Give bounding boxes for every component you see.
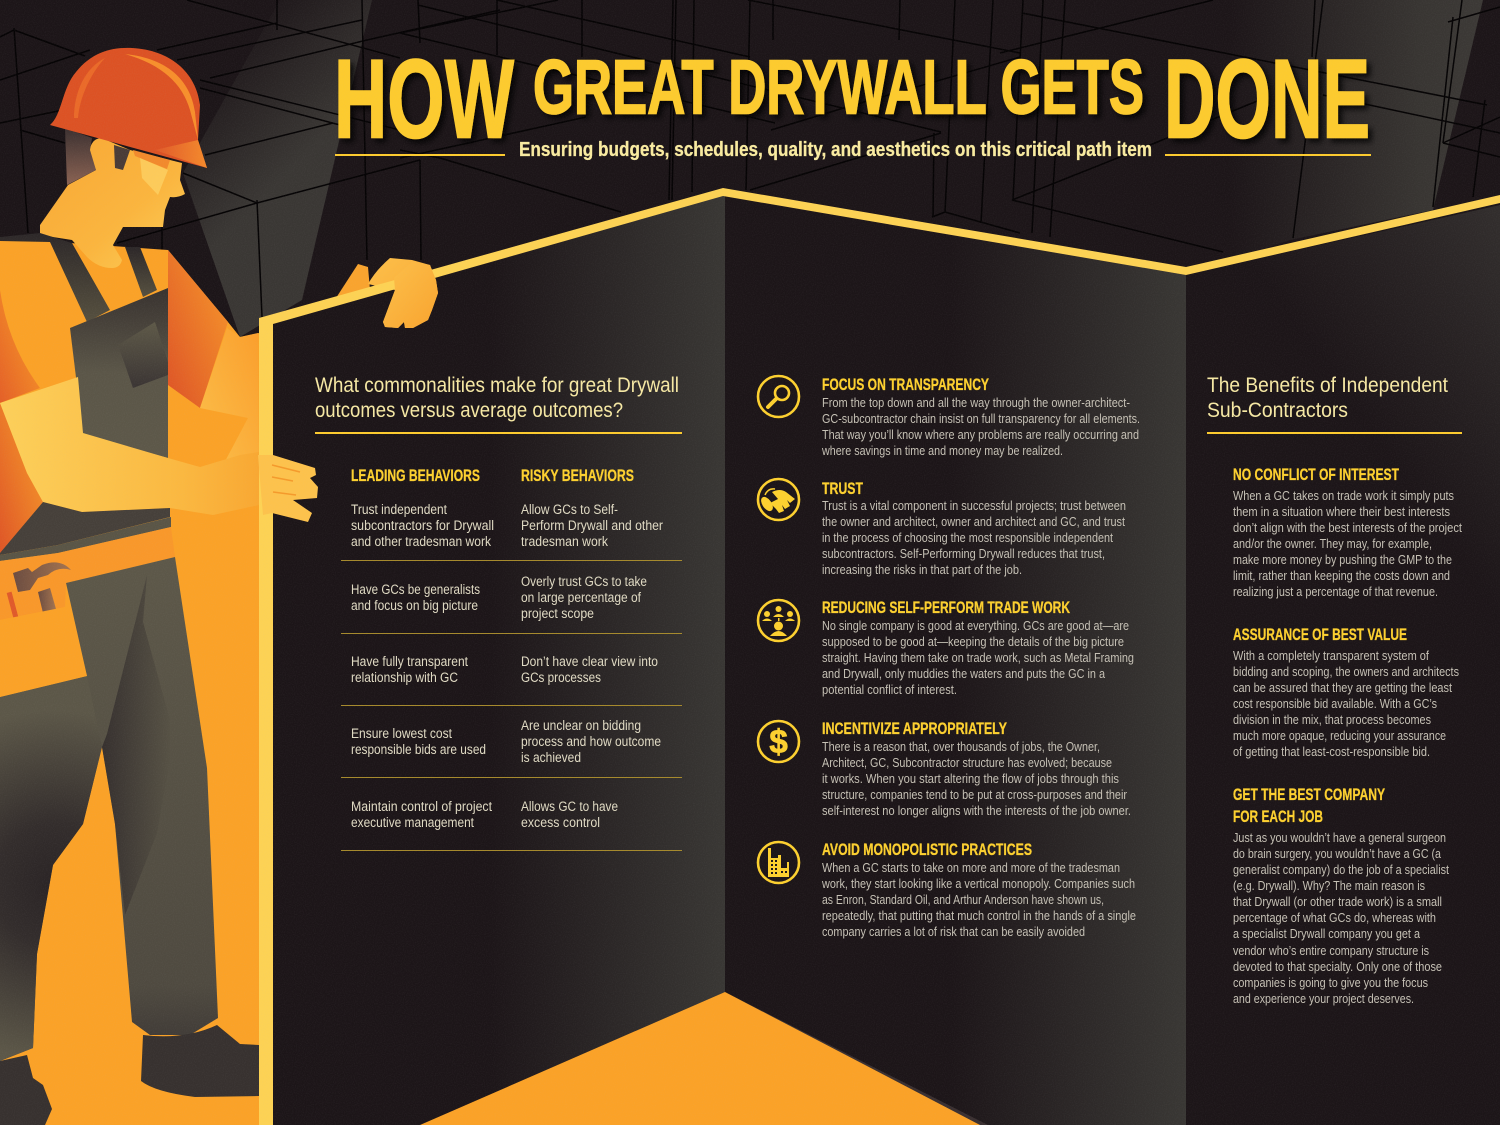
- section: avoid monopolistic practices: AVOID MONOPOLISTIC PRACTICES: [822, 840, 1032, 859]
- section: incentivize appropriately: it works. When you start altering the flow of jobs through this: [822, 771, 1119, 786]
- section: trust: in the process of choosing the most responsible independent: [822, 530, 1113, 545]
- cheek highlight: [140, 158, 168, 195]
- section: incentivize appropriately: Architect, GC, Subcontractor structure has evolved; because: [822, 755, 1112, 770]
- row 1: Allow GCs to Self-: [521, 502, 618, 517]
- row 4: [351, 718, 661, 765]
- section: assurance of best value: can be assured that they are getting the least: [1233, 680, 1452, 695]
- icon: factory buildings: [758, 842, 799, 883]
- row 5: [351, 799, 618, 830]
- upper arm: [200, 328, 259, 467]
- left panel heading: [315, 374, 679, 422]
- section: reducing self-perform trade work: straight. Having them take on trade work, such as Metal Framing: [822, 650, 1134, 665]
- section: reducing self-perform trade work: No single company is good at everything. GCs are good at—are: [822, 618, 1129, 633]
- row 4: Are unclear on bidding: [521, 718, 641, 733]
- section: focus on transparency: GC-subcontractor chain insist on full transparency for all elements.: [822, 411, 1140, 426]
- icon: handshake: [758, 479, 799, 520]
- section: get the best company for each job: FOR EACH JOB: [1233, 807, 1323, 826]
- trousers: [0, 557, 218, 1061]
- belt: [0, 517, 171, 561]
- row 2: Have GCs be generalists: [351, 582, 480, 597]
- upper hand over rim: [383, 262, 438, 328]
- section: trust: increasing the risks in that part of the job.: [822, 562, 1022, 577]
- worker illustration: [0, 48, 370, 1125]
- left panel heading: outcomes versus average outcomes?: [315, 399, 623, 422]
- trouser right leg: [0, 557, 218, 1061]
- right panel heading: [1207, 374, 1448, 422]
- section: incentivize appropriately: structure, companies tend to be put at cross-purposes and their: [822, 787, 1128, 802]
- neck and face: [40, 138, 185, 268]
- scaffold framing lines: [0, 0, 1500, 317]
- tool pouch: [0, 607, 87, 697]
- row 1: tradesman work: [521, 534, 608, 549]
- section: no conflict of interest: realizing just a percentage of that revenue.: [1233, 584, 1438, 599]
- row 1: Trust independent: [351, 502, 447, 517]
- title word: DONE: DONE: [1164, 36, 1370, 162]
- section: no conflict of interest: don’t align with the best interests of the project: [1233, 520, 1462, 535]
- row 3: GCs processes: [521, 670, 601, 685]
- section: assurance of best value: cost responsible bid available. With a GC’s: [1233, 696, 1437, 711]
- panel: right wall: [1186, 205, 1500, 1125]
- subtitle: Ensuring budgets, schedules, quality, and aesthetics on this critical path item: [519, 139, 1152, 161]
- section: reducing self-perform trade work: REDUCING SELF-PERFORM TRADE WORK: [822, 598, 1071, 617]
- section: no conflict of interest: limit, rather than keeping the costs down and: [1233, 568, 1450, 583]
- section: incentivize appropriately: INCENTIVIZE APPROPRIATELY: [822, 719, 1007, 738]
- section: trust: Trust is a vital component in successful projects; trust between: [822, 498, 1126, 513]
- section: trust: TRUST: [822, 479, 863, 498]
- row 1: Perform Drywall and other: [521, 518, 663, 533]
- right panel heading: Sub-Contractors: [1207, 399, 1348, 422]
- section: assurance of best value: ASSURANCE OF BEST VALUE: [1233, 625, 1407, 644]
- panel: middle wall: [725, 195, 1186, 1125]
- icon: dollar sign: [758, 721, 799, 762]
- overall bib: [70, 288, 168, 458]
- row 4: is achieved: [521, 750, 581, 765]
- section: reducing self-perform trade work: and Drywall, only muddies the waters and puts the GC in a: [822, 666, 1106, 681]
- panel: left wall: [273, 195, 725, 1125]
- section: focus on transparency: where savings in time and money may be realized.: [821, 443, 1063, 458]
- section: reducing self-perform trade work: [758, 598, 1134, 697]
- section: reducing self-perform trade work: potential conflict of interest.: [822, 682, 957, 697]
- pencil: [7, 592, 18, 618]
- right panel content: [1207, 374, 1462, 1006]
- row 5: Maintain control of project: [351, 799, 492, 814]
- section: get the best company for each job: and experience your project deserves.: [1233, 991, 1414, 1006]
- hair: [65, 128, 170, 195]
- row 3: Have fully transparent: [351, 654, 468, 669]
- section: avoid monopolistic practices: [758, 840, 1136, 939]
- panel top edge: [259, 188, 1500, 1125]
- section: incentivize appropriately: self-interest no longer aligns with the interests of the job owner.: [822, 803, 1131, 818]
- left panel heading: What commonalities make for great Drywall: [315, 374, 679, 397]
- section: get the best company for each job: GET THE BEST COMPANY: [1233, 785, 1385, 804]
- row 2: Overly trust GCs to take: [521, 574, 647, 589]
- shirt sleeve: [168, 250, 228, 408]
- forearm: [0, 377, 259, 515]
- section: avoid monopolistic practices: as Enron, Standard Oil, and Arthur Anderson have shown us,: [822, 892, 1104, 907]
- title: [334, 36, 1371, 162]
- column heading: leading behaviors: LEADING BEHAVIORS: [351, 466, 480, 485]
- section: avoid monopolistic practices: company carries a lot of risk that can be easily avoided: [822, 924, 1085, 939]
- section: get the best company for each job: percentage of what GCs do, whereas with: [1233, 910, 1436, 925]
- section: reducing self-perform trade work: supposed to be good at—keeping the details of the big picture: [822, 634, 1124, 649]
- row 4: responsible bids are used: [351, 742, 486, 757]
- section: avoid monopolistic practices: repeatedly, that putting that much control in the hands of a single: [822, 908, 1136, 923]
- shirt shadow left: [0, 290, 43, 553]
- section: focus on transparency: FOCUS ON TRANSPARENCY: [822, 375, 989, 394]
- row 3: relationship with GC: [351, 670, 458, 685]
- row 3: [351, 654, 658, 685]
- section: incentivize appropriately: There is a reason that, over thousands of jobs, the Owner,: [822, 739, 1100, 754]
- section: assurance of best value: much more opaque, reducing your assurance: [1233, 728, 1446, 743]
- section: focus on transparency: [758, 375, 1140, 458]
- boots: [0, 1025, 259, 1125]
- row 2: on large percentage of: [521, 590, 641, 605]
- row 5: executive management: [351, 815, 474, 830]
- row 2: project scope: [521, 606, 594, 621]
- left panel content: [315, 374, 682, 851]
- row 4: Ensure lowest cost: [351, 726, 452, 741]
- back finger of upper hand: [336, 264, 370, 298]
- row 1: subcontractors for Drywall: [351, 518, 494, 533]
- grey light beams: [183, 0, 1483, 337]
- body background orange: [0, 238, 259, 1125]
- section: get the best company for each job: companies is going to give you the focus: [1233, 975, 1428, 990]
- hammer: [13, 562, 71, 613]
- section: get the best company for each job: devoted to that specialty. Only one of those: [1233, 959, 1442, 974]
- section: no conflict of interest: [1233, 465, 1462, 599]
- section: get the best company for each job: Just as you wouldn’t have a general surgeon: [1233, 830, 1446, 845]
- lower hand on wall edge: [258, 455, 318, 522]
- section: get the best company for each job: vendor who’s entire company structure is: [1233, 943, 1429, 958]
- section: assurance of best value: of getting that least-cost-responsible bid.: [1233, 744, 1430, 759]
- section: focus on transparency: That way you’ll know where any problems are really occurring and: [822, 427, 1139, 442]
- icon: people group: [758, 600, 799, 641]
- section: avoid monopolistic practices: work, they start looking like a vertical monopoly. Companies such: [821, 876, 1135, 891]
- row 5: Allows GC to have: [521, 799, 618, 814]
- section: no conflict of interest: NO CONFLICT OF INTEREST: [1233, 465, 1399, 484]
- row 2: and focus on big picture: [351, 598, 478, 613]
- right panel heading: The Benefits of Independent: [1207, 374, 1448, 397]
- section: get the best company for each job: [1233, 785, 1449, 1006]
- helmet shadow on face: [133, 150, 170, 169]
- section: trust: [758, 479, 1126, 577]
- upper hand behind rim: [368, 258, 438, 328]
- icon: magnifying glass: [758, 376, 799, 417]
- section: focus on transparency: From the top down and all the way through the owner-architect-: [822, 395, 1130, 410]
- section: assurance of best value: With a completely transparent system of: [1233, 648, 1429, 663]
- section: get the best company for each job: generalist company) do the job of a specialist: [1233, 862, 1449, 877]
- section: assurance of best value: division in the mix, that process becomes: [1233, 712, 1431, 727]
- title word: HOW: HOW: [334, 36, 514, 162]
- icon: dollar sign: $: [769, 723, 788, 760]
- section: assurance of best value: [1233, 625, 1459, 759]
- section: get the best company for each job: a specialist Drywall company you get a: [1233, 926, 1421, 941]
- section: assurance of best value: bidding and scoping, the owners and architects: [1233, 664, 1459, 679]
- bib pocket: [118, 322, 168, 388]
- section: get the best company for each job: that Drywall (or other trade work) is a small: [1233, 894, 1442, 909]
- column heading: risky behaviors: RISKY BEHAVIORS: [521, 466, 634, 485]
- section: no conflict of interest: make more money by pushing the GMP to the: [1233, 552, 1452, 567]
- row 1: [351, 502, 663, 549]
- floor: [420, 992, 988, 1125]
- middle panel content: [758, 375, 1140, 939]
- section: trust: the owner and architect, owner and architect and GC, and trust: [822, 514, 1125, 529]
- hard hat: [50, 48, 207, 168]
- trouser shade right leg: [102, 575, 170, 915]
- title words: GREAT DRYWALL GETS: GREAT DRYWALL GETS: [533, 44, 1144, 130]
- row 3: Don’t have clear view into: [521, 654, 658, 669]
- section: no conflict of interest: and/or the owner. They may, for example,: [1233, 536, 1432, 551]
- overall straps: [0, 233, 157, 322]
- section: incentivize appropriately: [758, 719, 1131, 818]
- row 1: and other tradesman work: [351, 534, 491, 549]
- tool belt area: [0, 527, 175, 620]
- row 2: [351, 574, 647, 621]
- section: no conflict of interest: When a GC takes on trade work it simply puts: [1233, 488, 1454, 503]
- overalls waist: [0, 502, 170, 555]
- section: trust: subcontractors. Self-Performing Drywall reduces that trust,: [822, 546, 1105, 561]
- section: get the best company for each job: (e.g. Drywall). Why? The main reason is: [1233, 878, 1425, 893]
- row 5: excess control: [521, 815, 600, 830]
- row 4: process and how outcome: [521, 734, 661, 749]
- section: avoid monopolistic practices: When a GC starts to take on more and more of the tradesman: [822, 860, 1120, 875]
- trouser left leg: [0, 676, 102, 1061]
- section: no conflict of interest: them in a situation where their best interests: [1233, 504, 1450, 519]
- section: get the best company for each job: do brain surgery, you wouldn’t have a GC (a: [1233, 846, 1442, 861]
